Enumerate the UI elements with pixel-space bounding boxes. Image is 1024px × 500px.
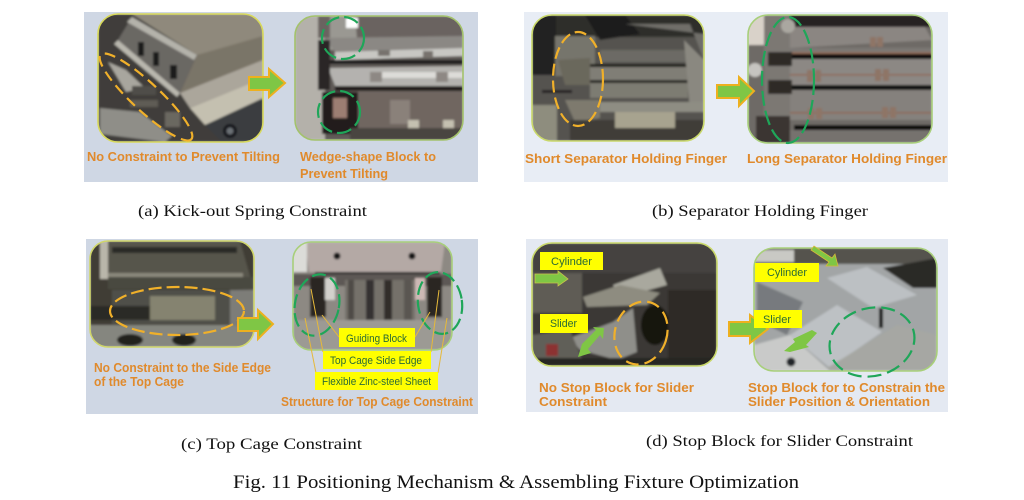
arrow bbox=[717, 77, 754, 106]
callout: cylinder bbox=[755, 263, 819, 282]
callout: cylinder: Cylinder bbox=[551, 256, 592, 268]
arrow bbox=[729, 315, 768, 343]
arrow: cylinder bbox=[811, 246, 838, 266]
panel: kick-out spring constraint bbox=[84, 12, 478, 182]
arrow: cylinder bbox=[535, 271, 568, 286]
arrow: slider bbox=[578, 327, 604, 357]
label: structure: Structure for Top Cage Constraint bbox=[281, 394, 474, 409]
caption a: (a) Kick-out Spring Constraint bbox=[138, 203, 368, 220]
photo: long finger bbox=[748, 15, 932, 143]
callout: slider bbox=[540, 314, 588, 333]
label: no constraint: No Constraint to Prevent Tilting bbox=[87, 149, 280, 164]
caption b: (b) Separator Holding Finger bbox=[652, 203, 869, 220]
photo: wedge-shape block bbox=[295, 16, 463, 140]
caption c: (c) Top Cage Constraint bbox=[181, 436, 363, 453]
photo: stop block installed bbox=[754, 246, 937, 386]
callout: flexible sheet bbox=[315, 372, 438, 390]
panel: stop block bbox=[526, 239, 948, 412]
panel: top cage constraint bbox=[86, 239, 478, 414]
arrow: slider bbox=[784, 330, 817, 352]
label: wedge-shape block second line: Prevent Tilting bbox=[300, 166, 388, 181]
photo: short finger bbox=[532, 15, 704, 141]
figure title: Fig. 11 Positioning Mechanism & Assembling Fixture Optimization bbox=[233, 472, 800, 493]
photo: no side constraint bbox=[90, 241, 254, 347]
arrow bbox=[238, 310, 273, 339]
label: no side constraint second line: of the Top Cage bbox=[94, 374, 184, 389]
label: short finger: Short Separator Holding Finger bbox=[525, 151, 727, 166]
callout: flexible sheet: Flexible Zinc-steel Sheet bbox=[322, 376, 431, 388]
label: no stop block second line: Constraint bbox=[539, 394, 608, 409]
label: stop block second line: Slider Position & Orientation bbox=[748, 394, 930, 409]
callout: top cage side edge bbox=[323, 351, 431, 369]
callout: cylinder: Cylinder bbox=[767, 267, 807, 279]
label: wedge-shape block: Wedge-shape Block to bbox=[300, 149, 436, 164]
pointer lines bbox=[305, 289, 447, 373]
callout: cylinder bbox=[540, 252, 603, 270]
callout: slider bbox=[754, 310, 802, 328]
label: no stop block: No Stop Block for Slider bbox=[539, 380, 694, 395]
photo: top cage structure bbox=[289, 242, 466, 350]
callout: slider: Slider bbox=[763, 314, 791, 326]
callout: guiding block bbox=[339, 328, 415, 347]
photo: no constraint bbox=[91, 14, 263, 150]
callout: top cage side edge: Top Cage Side Edge bbox=[330, 355, 422, 367]
label: no side constraint: No Constraint to the Side Edge bbox=[94, 360, 271, 375]
caption d: (d) Stop Block for Slider Constraint bbox=[646, 433, 914, 450]
label: long finger: Long Separator Holding Finger bbox=[747, 151, 947, 166]
callout: guiding block: Guiding Block bbox=[346, 333, 407, 345]
label: stop block: Stop Block for to Constrain the bbox=[748, 380, 945, 395]
panel: separator holding finger bbox=[524, 12, 948, 182]
photo: no stop block bbox=[532, 243, 717, 371]
arrow bbox=[249, 69, 285, 97]
callout: slider: Slider bbox=[550, 318, 577, 330]
